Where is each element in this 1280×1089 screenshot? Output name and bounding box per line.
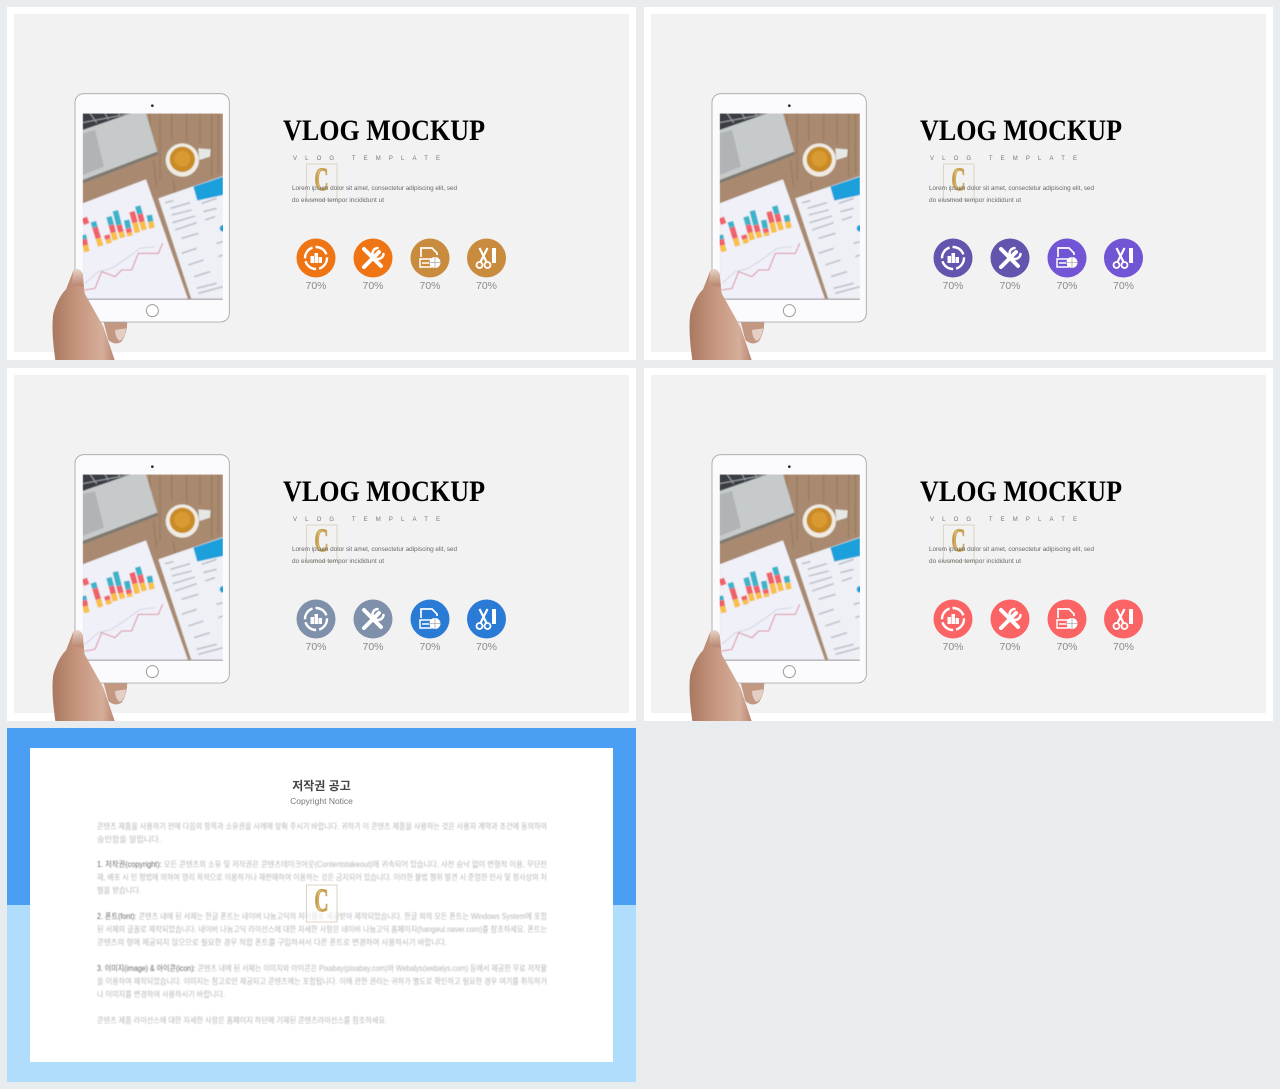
slide background <box>14 375 629 713</box>
light blue bottom band <box>7 905 636 1082</box>
panel: slide 4 coral <box>644 368 1273 721</box>
watermark: C <box>314 883 328 919</box>
percent labels: 70% <box>999 280 1021 292</box>
panel: slide 1 orange <box>7 7 636 360</box>
percent labels: 70% <box>1056 641 1078 653</box>
tablet held in hand <box>53 94 229 360</box>
body text: do eiusmod tempor incididunt ut <box>929 558 1021 565</box>
notice subtitle: Copyright Notice <box>290 796 353 806</box>
tablet held in hand <box>690 455 866 721</box>
body text <box>929 546 1094 565</box>
section 2 font <box>97 911 548 947</box>
icon: scissors <box>467 600 506 638</box>
section 3 image and icon <box>97 963 547 999</box>
watermark: C <box>314 162 328 198</box>
slide frame <box>7 7 636 360</box>
watermark <box>944 523 974 561</box>
icon row <box>934 238 1143 278</box>
watermark <box>306 883 337 922</box>
percent labels <box>305 280 497 292</box>
watermark <box>306 162 337 200</box>
icon: scissors <box>1104 238 1143 278</box>
heading: VLOG MOCKUP <box>920 475 1122 508</box>
icon row <box>934 600 1143 638</box>
section 3 image and icon: 3. 이미지(image) & 아이콘(icon): 콘텐츠 내에 된 서체는 이미지와 아이콘은 Pixabay(pixabay.com)와 Webalys(webalys.com) 등에서 제공한 무료 저작물 <box>97 963 547 973</box>
closing line: 콘텐츠 제품 라이선스에 대한 자세한 사항은 홈페이지 하단에 기재된 콘텐츠라이선스를 참조하세요. <box>97 1015 387 1025</box>
body text: do eiusmod tempor incididunt ut <box>929 197 1021 204</box>
subtitle: VLOG TEMPLATE <box>293 156 440 162</box>
icon: tools <box>354 600 392 638</box>
percent labels: 70% <box>419 280 441 292</box>
watermark: C <box>952 162 966 198</box>
percent labels <box>942 641 1134 653</box>
subtitle: VLOG TEMPLATE <box>930 156 1077 162</box>
tablet held in hand <box>690 94 866 360</box>
percent labels: 70% <box>1113 280 1134 292</box>
icon: document <box>410 600 450 638</box>
panel: copyright notice <box>7 728 636 1082</box>
heading: VLOG MOCKUP <box>283 114 485 147</box>
percent labels: 70% <box>362 280 384 292</box>
percent labels: 70% <box>305 641 327 653</box>
section 3 image and icon: 나 이미지를 변경하여 사용하시기 바랍니다. <box>97 989 225 999</box>
section 1 copyright: 벌을 받습니다. <box>97 885 141 895</box>
heading: VLOG MOCKUP <box>920 114 1122 147</box>
icon: tools <box>990 238 1030 278</box>
watermark <box>306 523 337 561</box>
icon: scissors <box>467 238 506 278</box>
section 2 font: 콘텐츠의 형에 제공되지 않으므로 필요한 경우 적합 폰트를 구입하셔서 다른 폰트로 변경하여 사용하시기 바랍니다. <box>97 937 447 947</box>
percent labels <box>942 280 1134 292</box>
body text: do eiusmod tempor incididunt ut <box>292 558 384 565</box>
icon row <box>296 600 506 638</box>
icon: chart ring <box>934 600 972 638</box>
body text: Lorem ipsum dolor sit amet, consectetur adipiscing elit, sed <box>292 185 457 192</box>
section 2 font: 된 서체의 글꼴로 제작되었습니다. 네이버 나눔고딕 라이선스에 대한 자세한 사항은 네이버 나눔고딕 홈페이지(hangeul.naver.com)를 참조하세요. 폰트는 <box>97 924 547 934</box>
icon: tools <box>990 600 1030 638</box>
icon: tools <box>354 238 392 278</box>
body text: do eiusmod tempor incididunt ut <box>292 197 384 204</box>
tablet held in hand <box>53 455 229 721</box>
body text <box>292 546 457 565</box>
white card <box>30 748 613 1062</box>
panel: slide 2 purple <box>644 7 1273 360</box>
percent labels: 70% <box>476 641 497 653</box>
icon: chart ring <box>934 238 972 278</box>
subtitle: VLOG TEMPLATE <box>293 517 440 523</box>
intro text: 콘텐츠 제품을 사용하기 전에 다음의 항목과 소유권을 사례에 맞춰 주시기 바랍니다. 귀하가 이 콘텐츠 제품을 사용하는 것은 사용자 계약과 조건에 동의하여 <box>97 821 547 831</box>
heading: VLOG MOCKUP <box>283 475 485 508</box>
percent labels: 70% <box>942 641 964 653</box>
section 3 image and icon: 을 이용하여 제작되었습니다. 이미지는 참고로만 제공되고 콘텐츠에는 포함됩니다. 이에 관한 권리는 귀하가 별도로 확인하고 필요한 경우 여기를 취득하거 <box>97 976 547 986</box>
icon: document <box>1048 238 1086 278</box>
icon row <box>296 238 506 278</box>
section 1 copyright: 재, 배포 시 민 형법에 의하여 영리 목적으로 이용하거나 재판매하여 이용하는 것은 금지되어 있습니다. 이러한 불법 행위 발견 시 준엄한 민사 및 형사상의 처 <box>97 872 547 882</box>
icon: scissors <box>1104 600 1143 638</box>
notice title: 저작권 공고 <box>292 778 351 793</box>
body text: Lorem ipsum dolor sit amet, consectetur adipiscing elit, sed <box>929 546 1094 553</box>
section 1 copyright <box>97 859 547 895</box>
percent labels: 70% <box>305 280 327 292</box>
percent labels: 70% <box>419 641 441 653</box>
icon: document <box>410 238 450 278</box>
percent labels: 70% <box>362 641 384 653</box>
icon: chart ring <box>296 238 336 278</box>
percent labels: 70% <box>1056 280 1078 292</box>
body text: Lorem ipsum dolor sit amet, consectetur adipiscing elit, sed <box>292 546 457 553</box>
slide background <box>651 14 1266 352</box>
slide background <box>651 375 1266 713</box>
percent labels <box>305 641 497 653</box>
slide frame <box>644 368 1273 721</box>
body text <box>929 185 1094 204</box>
percent labels: 70% <box>999 641 1021 653</box>
slide frame <box>7 368 636 721</box>
blue top band <box>7 728 636 905</box>
watermark: C <box>314 523 328 559</box>
icon: document <box>1048 600 1086 638</box>
slide background <box>14 14 629 352</box>
intro text: 승인함을 알립니다. <box>97 834 161 844</box>
percent labels: 70% <box>1113 641 1134 653</box>
section 1 copyright: 1. 저작권(copyright): 모든 콘텐츠의 소유 및 저작권은 콘텐츠테이크아웃(Contentstakeout)에 귀속되어 있습니다. 사전 승낙 없이 변형적 이용, 무단전 <box>97 859 547 869</box>
watermark <box>944 162 974 200</box>
intro text <box>97 821 547 844</box>
subtitle: VLOG TEMPLATE <box>930 517 1077 523</box>
panel: slide 3 blue <box>7 368 636 721</box>
body text: Lorem ipsum dolor sit amet, consectetur adipiscing elit, sed <box>929 185 1094 192</box>
watermark: C <box>952 523 966 559</box>
slide frame <box>644 7 1273 360</box>
percent labels: 70% <box>942 280 964 292</box>
section 2 font: 2. 폰트(font): 콘텐츠 내에 된 서체는 한글 폰트는 네이버 나눔고딕의 저작물로 제공받아 제작되었습니다. 한글 외의 모든 폰트는 Windows System에 포함 <box>97 911 548 921</box>
icon: chart ring <box>296 600 336 638</box>
body text <box>292 185 457 204</box>
percent labels: 70% <box>476 280 497 292</box>
